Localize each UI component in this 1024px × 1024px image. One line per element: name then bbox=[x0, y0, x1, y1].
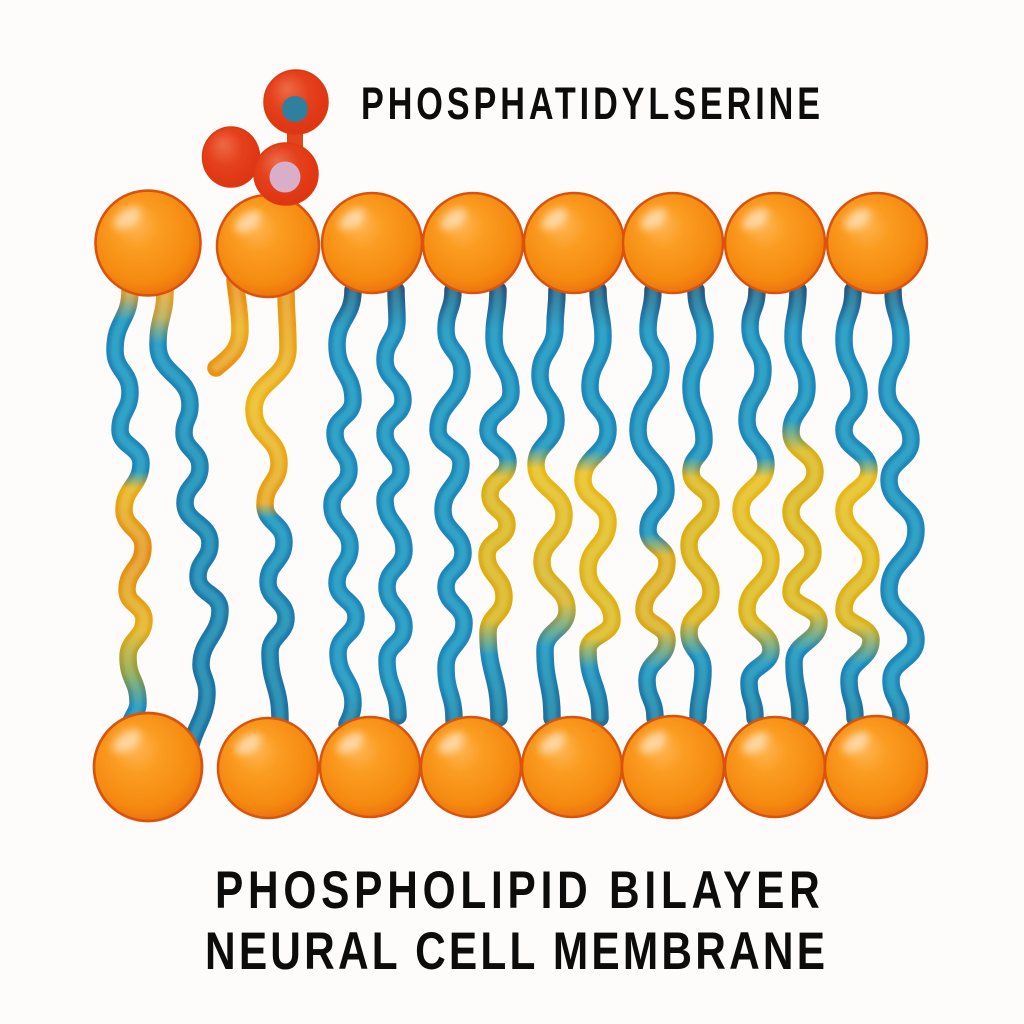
head bbox=[94, 713, 202, 821]
pink core bbox=[270, 162, 300, 192]
head bbox=[218, 718, 318, 818]
tail 12: blue with yellow segment bbox=[689, 290, 711, 718]
tail 10: blue with yellow segment bbox=[583, 290, 612, 718]
head bbox=[421, 717, 521, 817]
bottom row of phospholipid heads bbox=[94, 713, 927, 821]
tail 4: yellow and blue bbox=[254, 290, 288, 720]
head bbox=[825, 716, 927, 818]
bond bbox=[287, 128, 303, 154]
head bbox=[725, 193, 825, 293]
tail 14: blue with yellow segment bbox=[791, 290, 819, 718]
tail 11: blue with yellow segment bbox=[638, 290, 667, 718]
head bbox=[322, 193, 422, 293]
tail 3: short bent yellow tail bbox=[216, 280, 240, 368]
phosphatidylserine molecule bbox=[202, 70, 328, 205]
red sphere: lower bbox=[254, 143, 318, 205]
tail 16: blue bbox=[887, 290, 916, 718]
tail 8: blue with yellow segment bbox=[487, 290, 511, 718]
head with serine group bbox=[217, 195, 319, 297]
head bbox=[423, 193, 523, 293]
tail 7: blue bbox=[438, 290, 464, 720]
lipid tails bbox=[115, 280, 916, 745]
tail 2: blue bbox=[158, 290, 220, 745]
head bbox=[623, 193, 723, 293]
red sphere: left bbox=[202, 127, 260, 187]
head bbox=[827, 193, 927, 293]
head bbox=[522, 717, 622, 817]
head bbox=[96, 190, 200, 296]
head bbox=[320, 717, 420, 817]
label: phosphatidylserine: PHOSPHATIDYLSERINE bbox=[361, 80, 820, 129]
top row of phospholipid heads bbox=[96, 190, 927, 297]
tail 1: blue with yellow segment bbox=[115, 290, 144, 724]
red sphere: top bbox=[264, 70, 328, 134]
head bbox=[524, 193, 624, 293]
blue core bbox=[282, 96, 308, 122]
title line 2: NEURAL CELL MEMBRANE bbox=[205, 923, 825, 981]
tail 13: blue with yellow segment bbox=[741, 290, 771, 718]
tail 15: blue with yellow segment bbox=[844, 290, 871, 718]
tail 5: blue bbox=[332, 290, 356, 724]
tail 9: blue with yellow segment bbox=[536, 290, 567, 718]
tail 6: blue bbox=[385, 290, 404, 716]
head bbox=[725, 717, 825, 817]
title line 1: PHOSPHOLIPID BILAYER bbox=[215, 862, 820, 920]
head bbox=[622, 716, 724, 818]
